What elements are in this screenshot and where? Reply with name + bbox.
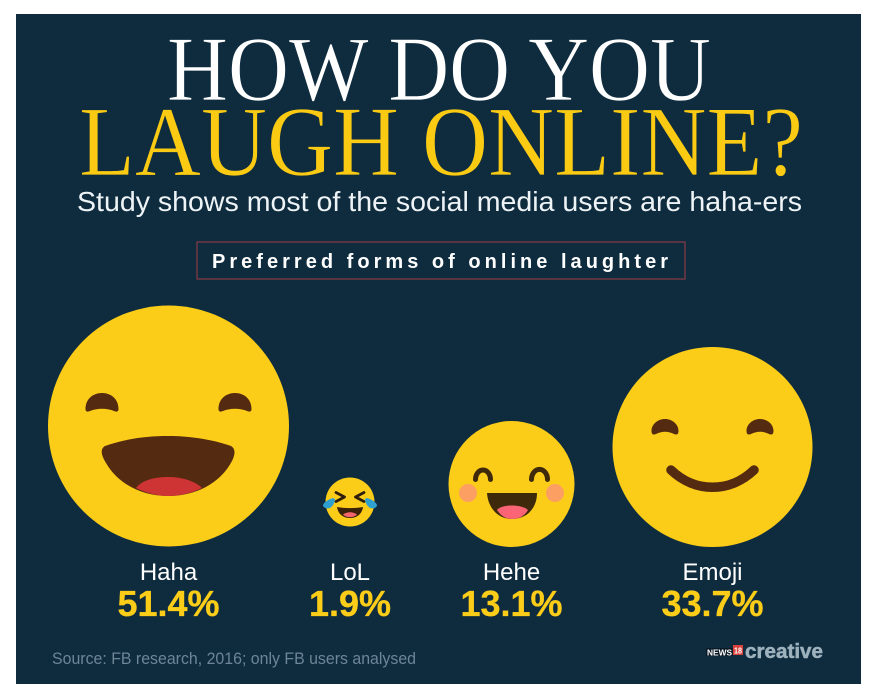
title line 2: LAUGH ONLINE? (79, 86, 803, 197)
section heading box: Preferred forms of online laughter (212, 251, 668, 273)
stat: Hehe: 13.1% (460, 583, 563, 624)
logo: News18 Creative: creative (745, 641, 823, 663)
icon: Emoji smile (612, 347, 812, 547)
title line 1: HOW DO YOU (167, 18, 711, 120)
stat: Emoji (661, 559, 764, 624)
stat: Hehe: Hehe (483, 559, 540, 586)
stat: Emoji: Emoji (682, 559, 743, 586)
stat: LoL: 1.9% (309, 583, 391, 624)
stat: Haha: 51.4% (117, 583, 220, 624)
icon: Haha emoji (48, 306, 289, 546)
logo: News18 Creative: NEWS (707, 648, 732, 658)
source note: Source: FB research, 2016; only FB users analysed (52, 650, 416, 668)
stat: Hehe (460, 559, 563, 624)
stat: LoL: LoL (330, 559, 370, 586)
stat: Haha (117, 559, 220, 624)
section heading box (197, 242, 685, 279)
icon: LoL emoji (323, 478, 377, 526)
subtitle: Study shows most of the social media users are haha-ers (77, 186, 802, 217)
icon: Hehe emoji (448, 421, 574, 547)
stat: Emoji: 33.7% (661, 583, 764, 624)
logo: News18 Creative: 18 (734, 646, 742, 656)
stat: Haha: Haha (140, 559, 198, 586)
logo: News18 Creative (706, 641, 823, 663)
stat: LoL (309, 559, 391, 624)
